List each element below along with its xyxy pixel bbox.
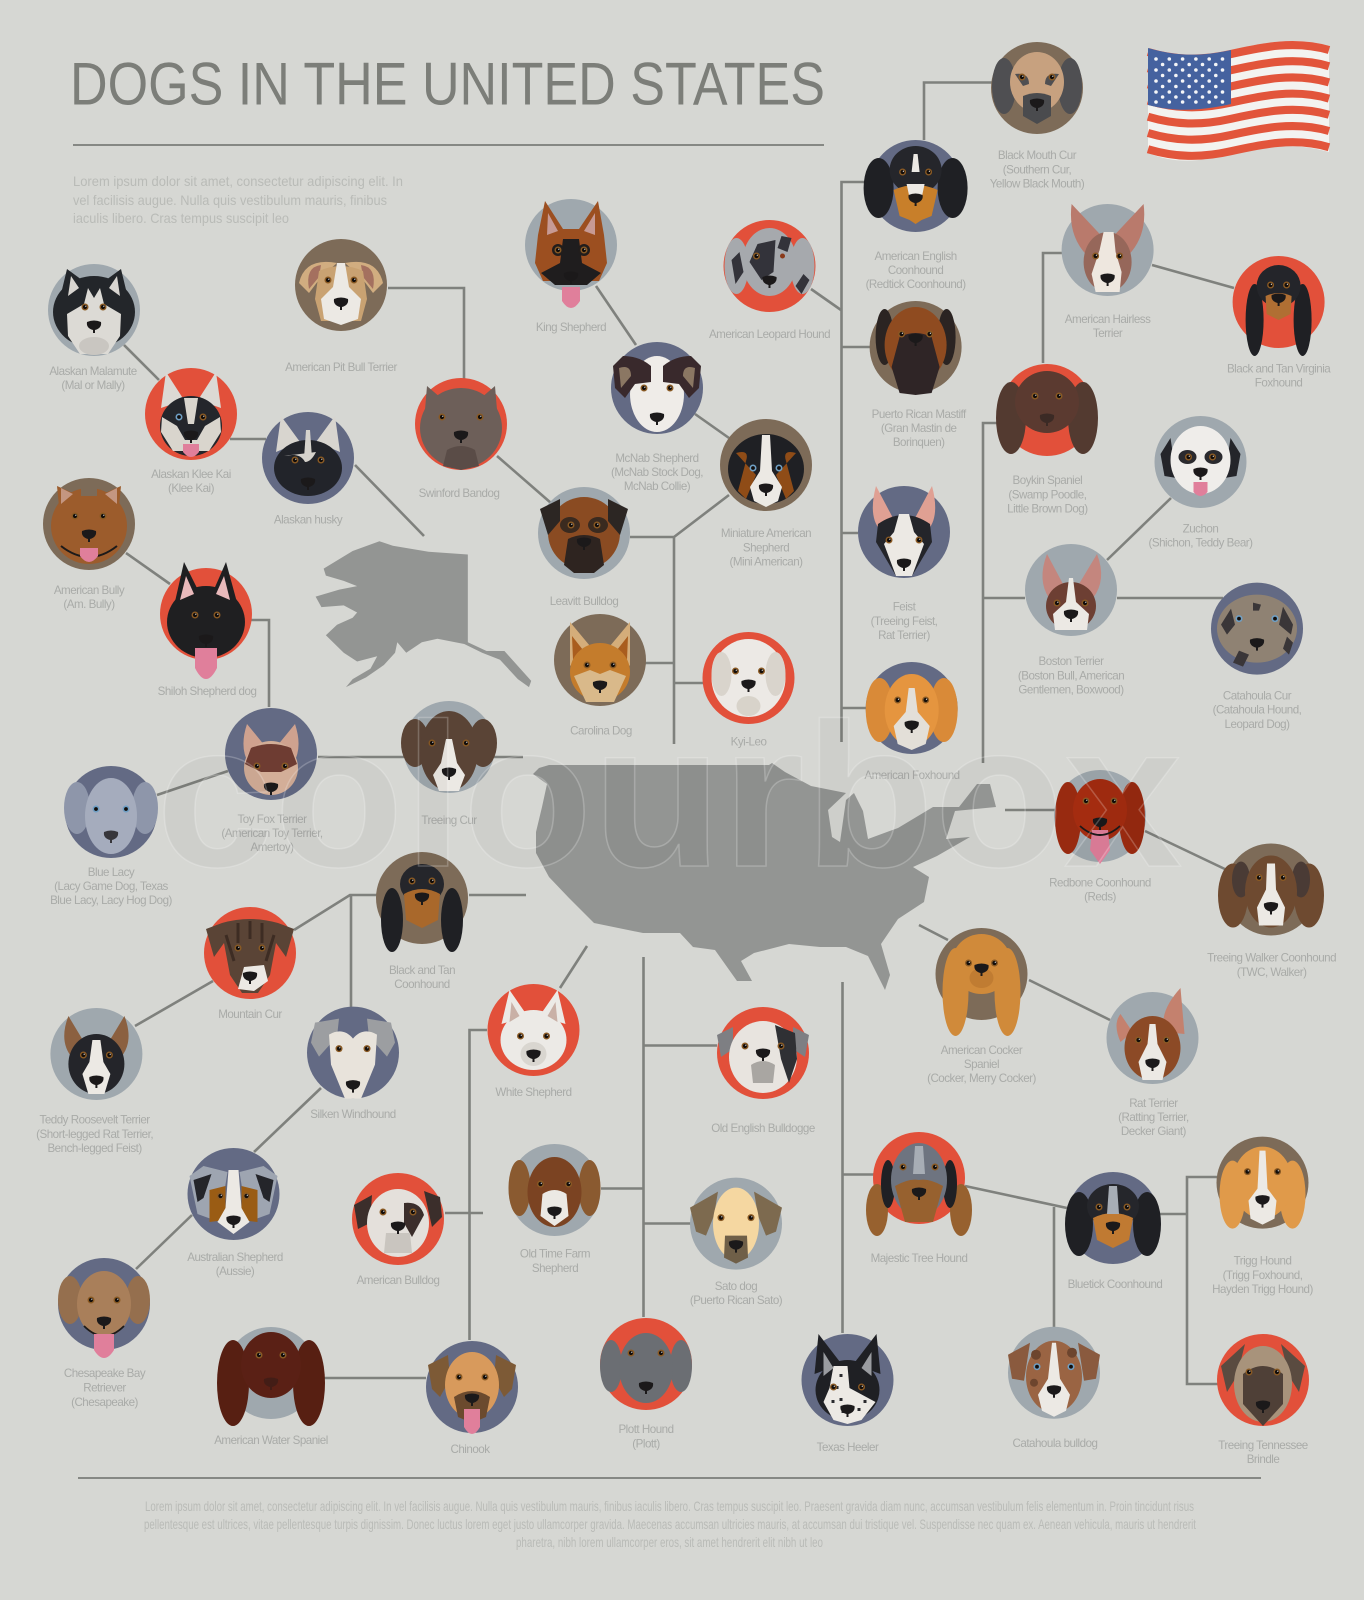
dog: American Water Spaniel	[214, 1327, 328, 1447]
label: Alaskan Klee Kai: Alaskan Klee Kai	[151, 468, 231, 481]
label: Teddy Roosevelt Terrier: Teddy Roosevelt Terrier	[40, 1114, 150, 1126]
connector: Boston to Catahoula Cur	[1117, 597, 1223, 599]
dog: Silken Windhound	[307, 1007, 399, 1121]
icon: Shiloh Shepherd dog	[160, 562, 252, 679]
label: American Leopard Hound: American Leopard Hound	[709, 328, 830, 341]
label: Rat Terrier: (Ratting Terrier,	[1118, 1111, 1189, 1124]
icon: American Hairless Terrier	[1062, 204, 1154, 296]
label: Silken Windhound: Silken Windhound	[310, 1108, 396, 1121]
divider: top rule	[73, 144, 824, 146]
label: Majestic Tree Hound: Majestic Tree Hound	[871, 1252, 967, 1265]
icon: Plott Hound	[600, 1318, 692, 1410]
label: Feist: Rat Terrier)	[878, 629, 931, 642]
label: Teddy Roosevelt Terrier: Bench-legged Feist)	[47, 1142, 142, 1155]
connector: McNab to Miniature American	[695, 414, 729, 438]
icon: Alaskan Malamute	[48, 264, 140, 356]
icon: Texas Heeler	[802, 1334, 894, 1426]
label: Plott Hound: Plott Hound	[618, 1423, 674, 1436]
connector: Bully to Shiloh	[126, 553, 170, 584]
connector: Klee Kai to Husky	[230, 438, 266, 440]
icon: McNab Shepherd	[611, 342, 703, 434]
icon: Toy Fox Terrier	[225, 708, 317, 800]
icon: Black and Tan Coonhound	[376, 852, 468, 952]
connector: Plott trunk	[601, 957, 717, 1317]
label: Blue Lacy: Blue Lacy	[88, 866, 135, 879]
icon: Treeing Walker Coonhound	[1218, 844, 1324, 936]
dog: Shiloh Shepherd dog	[158, 562, 256, 698]
label: Boston Terrier: Boston Terrier	[1039, 655, 1104, 668]
dog: Chesapeake Bay Retriever	[58, 1258, 150, 1409]
icon: Bluetick Coonhound	[1065, 1172, 1161, 1264]
dog: Old Time Farm Shepherd	[508, 1144, 600, 1275]
icon: Miniature American Shepherd	[720, 419, 812, 511]
label: Old Time Farm Shepherd: Shepherd	[532, 1262, 578, 1275]
connector: Redbone to Walker	[1145, 831, 1229, 871]
dog: Toy Fox Terrier	[221, 708, 323, 854]
label: Catahoula Cur: Leopard Dog)	[1225, 718, 1290, 731]
connector lines	[124, 82, 1234, 1384]
dog: Alaskan husky	[262, 412, 354, 526]
label: White Shepherd: White Shepherd	[495, 1086, 572, 1099]
dog: Boston Terrier	[1018, 544, 1124, 697]
dog: American Bulldog	[352, 1173, 444, 1287]
label: Toy Fox Terrier: Amertoy)	[250, 841, 294, 854]
label: King Shepherd: King Shepherd	[536, 321, 606, 334]
label: Teddy Roosevelt Terrier: (Short-legged Rat Terrier,	[36, 1128, 153, 1141]
dog: Blue Lacy	[50, 766, 173, 907]
connector: King to McNab	[596, 286, 636, 345]
icon: Australian Shepherd	[188, 1148, 280, 1240]
icon: Feist	[858, 486, 950, 578]
dog: Feist	[858, 486, 950, 642]
dog: Mountain Cur	[204, 907, 296, 1021]
label: Australian Shepherd: (Aussie)	[216, 1265, 255, 1278]
icon: Leavitt Bulldog	[538, 487, 630, 579]
icon: Old Time Farm Shepherd	[508, 1144, 600, 1236]
label: Chesapeake Bay Retriever: (Chesapeake)	[71, 1396, 139, 1409]
label: Treeing Tennessee Brindle: Brindle	[1247, 1453, 1279, 1466]
icon: American Pit Bull Terrier	[295, 239, 387, 331]
icon: King Shepherd	[525, 199, 617, 308]
label: American Hairless Terrier: American Hairless	[1065, 313, 1151, 326]
label: Boykin Spaniel: (Swamp Poodle,	[1008, 488, 1087, 502]
icon: Treeing Tennessee Brindle	[1217, 1334, 1309, 1426]
dog: Swinford Bandog	[415, 378, 507, 500]
icon: Rat Terrier	[1106, 988, 1198, 1084]
label: Boston Terrier: Gentlemen, Boxwood)	[1018, 684, 1124, 697]
label: Zuchon: (Shichon, Teddy Bear)	[1148, 537, 1253, 550]
label: Redbone Coonhound: (Reds)	[1084, 890, 1117, 904]
label: American Hairless Terrier: Terrier	[1093, 327, 1123, 340]
label: Old Time Farm Shepherd: Old Time Farm	[520, 1247, 590, 1260]
intro text block: iaculis libero. Cras tempus suscipit leo	[73, 210, 289, 226]
icon: Swinford Bandog	[415, 378, 507, 470]
label: McNab Shepherd: McNab Shepherd	[615, 452, 699, 465]
icon: Chinook	[426, 1341, 518, 1434]
label: Feist: (Treeing Feist,	[871, 615, 938, 628]
label: Black Mouth Cur: (Southern Cur,	[1003, 163, 1071, 176]
connector: Cocker to Rat Terrier	[1029, 980, 1110, 1020]
label: Chinook: Chinook	[450, 1443, 490, 1456]
label: American Water Spaniel: American Water Spaniel	[214, 1434, 328, 1447]
connector: Majestic to Bluetick	[965, 1186, 1067, 1208]
connector: Hairless to Virginia	[1152, 265, 1234, 288]
icon: White Shepherd	[488, 984, 580, 1076]
icon: Zuchon	[1154, 416, 1246, 508]
icon: Catahoula Cur	[1211, 583, 1303, 675]
dog: Black Mouth Cur	[990, 42, 1085, 190]
dog: Majestic Tree Hound	[866, 1132, 972, 1265]
label: Blue Lacy: Blue Lacy, Lacy Hog Dog)	[50, 894, 173, 907]
label: Mountain Cur: Mountain Cur	[218, 1008, 282, 1021]
connector: Redbone	[1005, 809, 1055, 811]
dog: Chinook	[426, 1341, 518, 1456]
title: DOGS IN THE UNITED STATES	[70, 50, 825, 118]
label: Chesapeake Bay Retriever: Chesapeake Bay	[64, 1367, 146, 1380]
label: Alaskan husky: Alaskan husky	[274, 514, 343, 526]
icon: Alaskan husky	[262, 412, 354, 504]
label: American English Coonhound: Coonhound	[888, 264, 943, 277]
dog: American Foxhound	[864, 662, 960, 782]
label: Boykin Spaniel: Boykin Spaniel	[1013, 474, 1082, 487]
label: Treeing Walker Coonhound: (TWC, Walker)	[1237, 966, 1307, 979]
connector: Pit Bull to Bandog	[388, 288, 464, 379]
icon: Catahoula bulldog	[1008, 1327, 1100, 1419]
dog: Treeing Walker Coonhound	[1207, 844, 1336, 979]
connector: Chinook trunk	[470, 1030, 487, 1340]
label: Black and Tan Coonhound: Black and Tan	[389, 964, 455, 977]
intro text block: vel facilisis augue. Nulla quis vestibulum mauris, finibus	[73, 192, 387, 208]
icon: Kyi-Leo	[702, 632, 794, 724]
dog: White Shepherd	[488, 984, 580, 1099]
dog: American Bully	[43, 478, 135, 611]
label: Puerto Rican Mastiff: (Gran Mastin de	[881, 422, 957, 435]
dog: American English Coonhound	[864, 140, 968, 291]
label: Texas Heeler: Texas Heeler	[817, 1441, 879, 1454]
label: American Bully: (Am. Bully)	[63, 598, 115, 611]
label: Blue Lacy: (Lacy Game Dog, Texas	[54, 880, 169, 893]
connector: Catahoula Bulldog	[1053, 1207, 1055, 1327]
connector: Silken to Aussie	[254, 1088, 321, 1152]
dog: Texas Heeler	[802, 1334, 894, 1454]
label: Australian Shepherd: Australian Shepherd	[187, 1251, 283, 1264]
connector: White Shepherd	[560, 946, 587, 988]
connector: Black and Tan branch	[294, 895, 526, 1007]
label: Trigg Hound: Hayden Trigg Hound)	[1212, 1283, 1313, 1296]
label: Old English Bulldogge: Old English Bulldogge	[711, 1122, 815, 1135]
dog: Alaskan Malamute	[48, 264, 140, 392]
dog: Old English Bulldogge	[711, 1007, 815, 1135]
map: Alaska	[316, 541, 531, 687]
label: Catahoula Cur: (Catahoula Hound,	[1213, 704, 1302, 717]
dog: McNab Shepherd	[611, 342, 703, 493]
label: Trigg Hound: (Trigg Foxhound,	[1223, 1269, 1303, 1282]
icon: Boykin Spaniel	[996, 364, 1098, 456]
connector: Bandog to Leavitt	[497, 456, 551, 503]
dog: Treeing Cur	[401, 701, 497, 827]
dog: Boykin Spaniel	[996, 364, 1098, 516]
dog: Sato dog	[690, 1178, 783, 1307]
watermark: colourbox: colourbox	[156, 681, 1182, 910]
dog: Bluetick Coonhound	[1065, 1172, 1162, 1291]
label: Trigg Hound: Trigg Hound	[1234, 1254, 1291, 1268]
dog: Zuchon	[1148, 416, 1253, 550]
label: Black Mouth Cur: Black Mouth Cur	[998, 149, 1077, 162]
label: American Cocker Spaniel: Spaniel	[964, 1058, 999, 1071]
label: Black and Tan Virginia Foxhound: Black and Tan Virginia	[1227, 363, 1331, 376]
connector: Leavitt trunk	[630, 495, 729, 744]
icon: American Water Spaniel	[217, 1327, 325, 1426]
label: Alaskan Malamute: Alaskan Malamute	[49, 365, 137, 378]
connector: central hound trunk	[842, 182, 870, 742]
connector: Trigg and Brindle bracket	[1159, 1177, 1218, 1384]
label: Black Mouth Cur: Yellow Black Mouth)	[990, 177, 1085, 190]
icon: Silken Windhound	[307, 1007, 399, 1099]
label: Treeing Walker Coonhound: Treeing Walker Coonhound	[1207, 952, 1336, 965]
flag: United States	[1148, 41, 1329, 161]
label: Alaskan Malamute: (Mal or Mally)	[61, 379, 125, 392]
label: Sato dog: Sato dog	[715, 1280, 757, 1293]
label: Treeing Cur: Treeing Cur	[421, 814, 477, 827]
icon: Treeing Cur	[401, 701, 497, 793]
label: McNab Shepherd: McNab Collie)	[624, 480, 691, 493]
label: Black and Tan Virginia Foxhound: Foxhound	[1255, 376, 1302, 389]
dog: American Leopard Hound	[709, 220, 830, 341]
connector: Toy Fox to Treeing Cur	[318, 756, 523, 758]
icon: American Bulldog	[352, 1173, 444, 1265]
label: McNab Shepherd: (McNab Stock Dog,	[611, 466, 703, 479]
label: American Cocker Spaniel: American Cocker	[941, 1044, 1023, 1057]
label: Boykin Spaniel: Little Brown Dog)	[1007, 503, 1088, 516]
label: American Pit Bull Terrier: American Pit Bull Terrier	[285, 361, 397, 374]
connector: Malamute to Klee Kai	[124, 345, 159, 380]
connector: Husky to Alaska	[355, 465, 424, 536]
map: contiguous United States	[533, 763, 996, 990]
connector: Toy Fox to Blue Lacy	[157, 771, 228, 795]
connector: American Bulldog	[445, 1212, 483, 1214]
label: Catahoula Cur: Catahoula Cur	[1223, 690, 1292, 703]
dog: Trigg Hound	[1212, 1137, 1313, 1296]
connector: Carolina and Kyi-Leo	[645, 663, 703, 683]
dog: American Pit Bull Terrier	[285, 239, 397, 374]
connector: Shiloh to Toy Fox	[251, 620, 269, 707]
dog: American Cocker Spaniel	[927, 928, 1037, 1085]
connector: Aussie to Chesapeake	[136, 1215, 192, 1269]
label: Puerto Rican Mastiff: Puerto Rican Mastiff	[872, 408, 967, 421]
label: Rat Terrier: Rat Terrier	[1129, 1097, 1178, 1110]
dog: Redbone Coonhound	[1049, 770, 1151, 904]
dog: Black and Tan Coonhound	[376, 852, 468, 991]
icon: American Foxhound	[866, 662, 958, 754]
label: Miniature American Shepherd: Shepherd	[743, 542, 789, 554]
icon: Mountain Cur	[204, 907, 296, 999]
dog: Miniature American Shepherd	[720, 419, 812, 569]
dog: Black and Tan Virginia Foxhound	[1227, 256, 1331, 389]
icon: Trigg Hound	[1216, 1137, 1308, 1229]
dog: Plott Hound	[600, 1318, 692, 1450]
label: American Cocker Spaniel: (Cocker, Merry Cocker)	[927, 1072, 1037, 1085]
icon: Chesapeake Bay Retriever	[58, 1258, 150, 1358]
label: Toy Fox Terrier: (American Toy Terrier,	[221, 827, 323, 840]
label: Toy Fox Terrier: Toy Fox Terrier	[238, 813, 307, 826]
label: American English Coonhound: American English	[874, 250, 957, 263]
label: Miniature American Shepherd: (Mini American)	[729, 556, 803, 569]
connector: Cocker	[919, 925, 948, 940]
icon: Carolina Dog	[554, 614, 646, 706]
connector: Water Spaniel to Chinook	[323, 1377, 426, 1379]
icon: Teddy Roosevelt Terrier	[50, 1008, 142, 1100]
dog: Kyi-Leo	[702, 632, 794, 748]
dog: Puerto Rican Mastiff	[870, 301, 967, 449]
label: Swinford Bandog: Swinford Bandog	[419, 487, 499, 500]
connector: Leopard Hound	[811, 289, 841, 310]
label: Redbone Coonhound: Redbone Coonhound	[1049, 876, 1151, 890]
label: Leavitt Bulldog: Leavitt Bulldog	[550, 595, 618, 608]
icon: Boston Terrier	[1025, 544, 1117, 636]
label: Carolina Dog: Carolina Dog	[570, 725, 632, 738]
icon: Alaskan Klee Kai	[145, 368, 237, 460]
dog: Alaskan Klee Kai	[145, 368, 237, 495]
label: American Bully: American Bully	[54, 584, 125, 597]
label: American English Coonhound: (Redtick Coonhound)	[866, 278, 966, 291]
icon: Sato dog	[690, 1178, 782, 1270]
label: Miniature American Shepherd: Miniature American	[721, 527, 811, 540]
connector: Mountain Cur to Teddy	[135, 981, 213, 1026]
label: Kyi-Leo: Kyi-Leo	[731, 736, 766, 748]
label: Chesapeake Bay Retriever: Retriever	[83, 1381, 126, 1394]
label: Catahoula bulldog: Catahoula bulldog	[1013, 1437, 1098, 1450]
dog: King Shepherd	[525, 199, 617, 334]
dog: Carolina Dog	[554, 614, 646, 738]
icon: Old English Bulldogge	[717, 1007, 809, 1099]
label: Feist: Feist	[893, 600, 917, 614]
label: Black and Tan Coonhound: Coonhound	[394, 978, 450, 991]
label: Bluetick Coonhound: Bluetick Coonhound	[1068, 1278, 1162, 1291]
dog: Leavitt Bulldog	[538, 487, 630, 608]
icon: Blue Lacy	[64, 766, 158, 858]
dog: Rat Terrier	[1106, 988, 1198, 1138]
icon: Black Mouth Cur	[991, 42, 1083, 134]
connector: Boston to Zuchon	[1107, 498, 1171, 560]
label: Shiloh Shepherd dog: Shiloh Shepherd dog	[158, 685, 256, 698]
icon: American Bully	[43, 478, 135, 570]
dog: Catahoula Cur	[1211, 583, 1303, 731]
icon: Puerto Rican Mastiff	[870, 301, 962, 395]
icon: Redbone Coonhound	[1054, 770, 1146, 864]
divider: bottom rule	[78, 1477, 1261, 1479]
label: Rat Terrier: Decker Giant)	[1121, 1125, 1187, 1138]
label: Boston Terrier: (Boston Bull, American	[1018, 670, 1124, 683]
label: Alaskan Klee Kai: (Klee Kai)	[168, 482, 215, 495]
dog: Australian Shepherd	[187, 1148, 283, 1278]
label: Zuchon: Zuchon	[1183, 523, 1218, 536]
connector: Black Mouth Cur	[924, 82, 992, 140]
icon: Majestic Tree Hound	[866, 1132, 972, 1236]
dog: American Hairless Terrier	[1062, 204, 1154, 340]
connector: Texas trunk	[842, 982, 874, 1333]
connector: Hairless Terrier	[1043, 253, 1062, 363]
footer text block: pharetra, nibh lorem ullamcorper eros, sit amet hendrerit elit nibh ut leo	[516, 1534, 823, 1550]
dog: Treeing Tennessee Brindle	[1217, 1334, 1309, 1466]
dog: Catahoula bulldog	[1008, 1327, 1100, 1450]
icon: Black and Tan Virginia Foxhound	[1233, 256, 1325, 356]
dog: Teddy Roosevelt Terrier	[36, 1008, 153, 1155]
icon: American Cocker Spaniel	[936, 928, 1028, 1036]
label: American Bulldog: American Bulldog	[357, 1274, 439, 1287]
label: Sato dog: (Puerto Rican Sato)	[690, 1294, 783, 1307]
icon: American Leopard Hound	[724, 220, 816, 312]
connector: Boykin trunk	[983, 423, 1025, 763]
icon: American English Coonhound	[864, 140, 968, 232]
label: Puerto Rican Mastiff: Borinquen)	[893, 436, 945, 449]
label: Plott Hound: (Plott)	[632, 1438, 660, 1450]
intro text block: Lorem ipsum dolor sit amet, consectetur adipiscing elit. In	[73, 173, 403, 189]
label: Treeing Tennessee Brindle: Treeing Tennessee	[1218, 1439, 1308, 1452]
label: American Foxhound: American Foxhound	[864, 769, 960, 782]
